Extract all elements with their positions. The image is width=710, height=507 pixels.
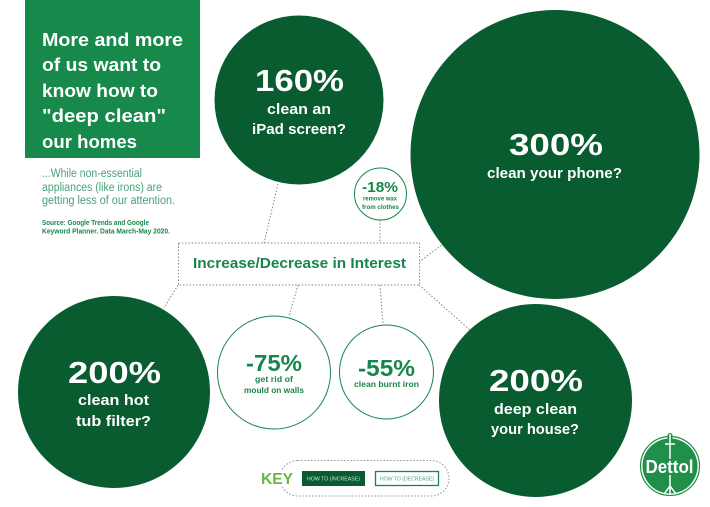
circle: 160%: clean an xyxy=(267,102,331,118)
circle: -75% xyxy=(218,316,330,429)
heading: "deep clean" xyxy=(42,105,166,126)
circle: -18%: remove wax xyxy=(363,196,398,202)
key: increase xyxy=(302,471,365,486)
circle: -75%: get rid of xyxy=(255,374,293,384)
circle: 200% deep clean: 200% xyxy=(489,363,583,398)
circle: 300%: clean your phone? xyxy=(487,166,622,182)
icon: Dettol logo: Dettol xyxy=(646,457,694,477)
source note: Source: Google Trends and Google xyxy=(42,220,149,227)
key: decrease: HOW TO (DECREASE) xyxy=(380,476,434,482)
heading: know how to xyxy=(42,80,158,101)
heading: our homes xyxy=(42,131,137,152)
circle: -18% xyxy=(354,168,406,220)
circle: -75%: mould on walls xyxy=(244,385,304,395)
circle: 200% deep clean xyxy=(439,304,632,497)
key xyxy=(258,460,449,496)
circle: 160%: iPad screen? xyxy=(252,122,346,138)
source note: Keyword Planner. Data March-May 2020. xyxy=(42,228,170,236)
key title: KEY xyxy=(261,471,293,488)
subheading text: getting less of our attention. xyxy=(42,195,175,207)
circle: 300%: 300% xyxy=(509,127,603,162)
label box: increase/decrease: Increase/Decrease in Interest xyxy=(193,256,406,272)
circle: -55% xyxy=(340,325,434,419)
circle: 200% hot tub: tub filter? xyxy=(76,414,151,430)
panel: title xyxy=(25,0,200,158)
circle: 160% xyxy=(214,16,384,184)
icon: Dettol logo xyxy=(640,433,700,496)
circle: 200% hot tub: clean hot xyxy=(78,393,149,409)
label box: increase/decrease xyxy=(178,243,420,285)
circle: -18%: from clothes xyxy=(362,205,400,211)
circle: 200% deep clean: your house? xyxy=(491,422,579,438)
subheading text: appliances (like irons) are xyxy=(42,182,162,194)
heading: More and more xyxy=(42,29,183,50)
subheading text xyxy=(42,168,175,207)
circle: -18%: -18% xyxy=(362,179,398,196)
source note xyxy=(42,220,170,236)
circle: 300% xyxy=(410,10,700,299)
key: decrease xyxy=(376,472,438,486)
circle: 200% hot tub xyxy=(18,296,210,488)
circle: 200% hot tub: 200% xyxy=(68,355,161,390)
key: increase: HOW TO (INCREASE) xyxy=(307,476,360,482)
subheading text: ...While non-essential xyxy=(42,168,142,180)
heading xyxy=(42,29,183,152)
circle: -55%: clean burnt iron xyxy=(354,379,419,389)
circle: 160%: 160% xyxy=(255,63,344,98)
circle: 200% deep clean: deep clean xyxy=(494,402,577,418)
circle: -75%: -75% xyxy=(246,350,302,376)
heading: of us want to xyxy=(42,54,161,75)
circle: -55%: -55% xyxy=(358,355,415,381)
